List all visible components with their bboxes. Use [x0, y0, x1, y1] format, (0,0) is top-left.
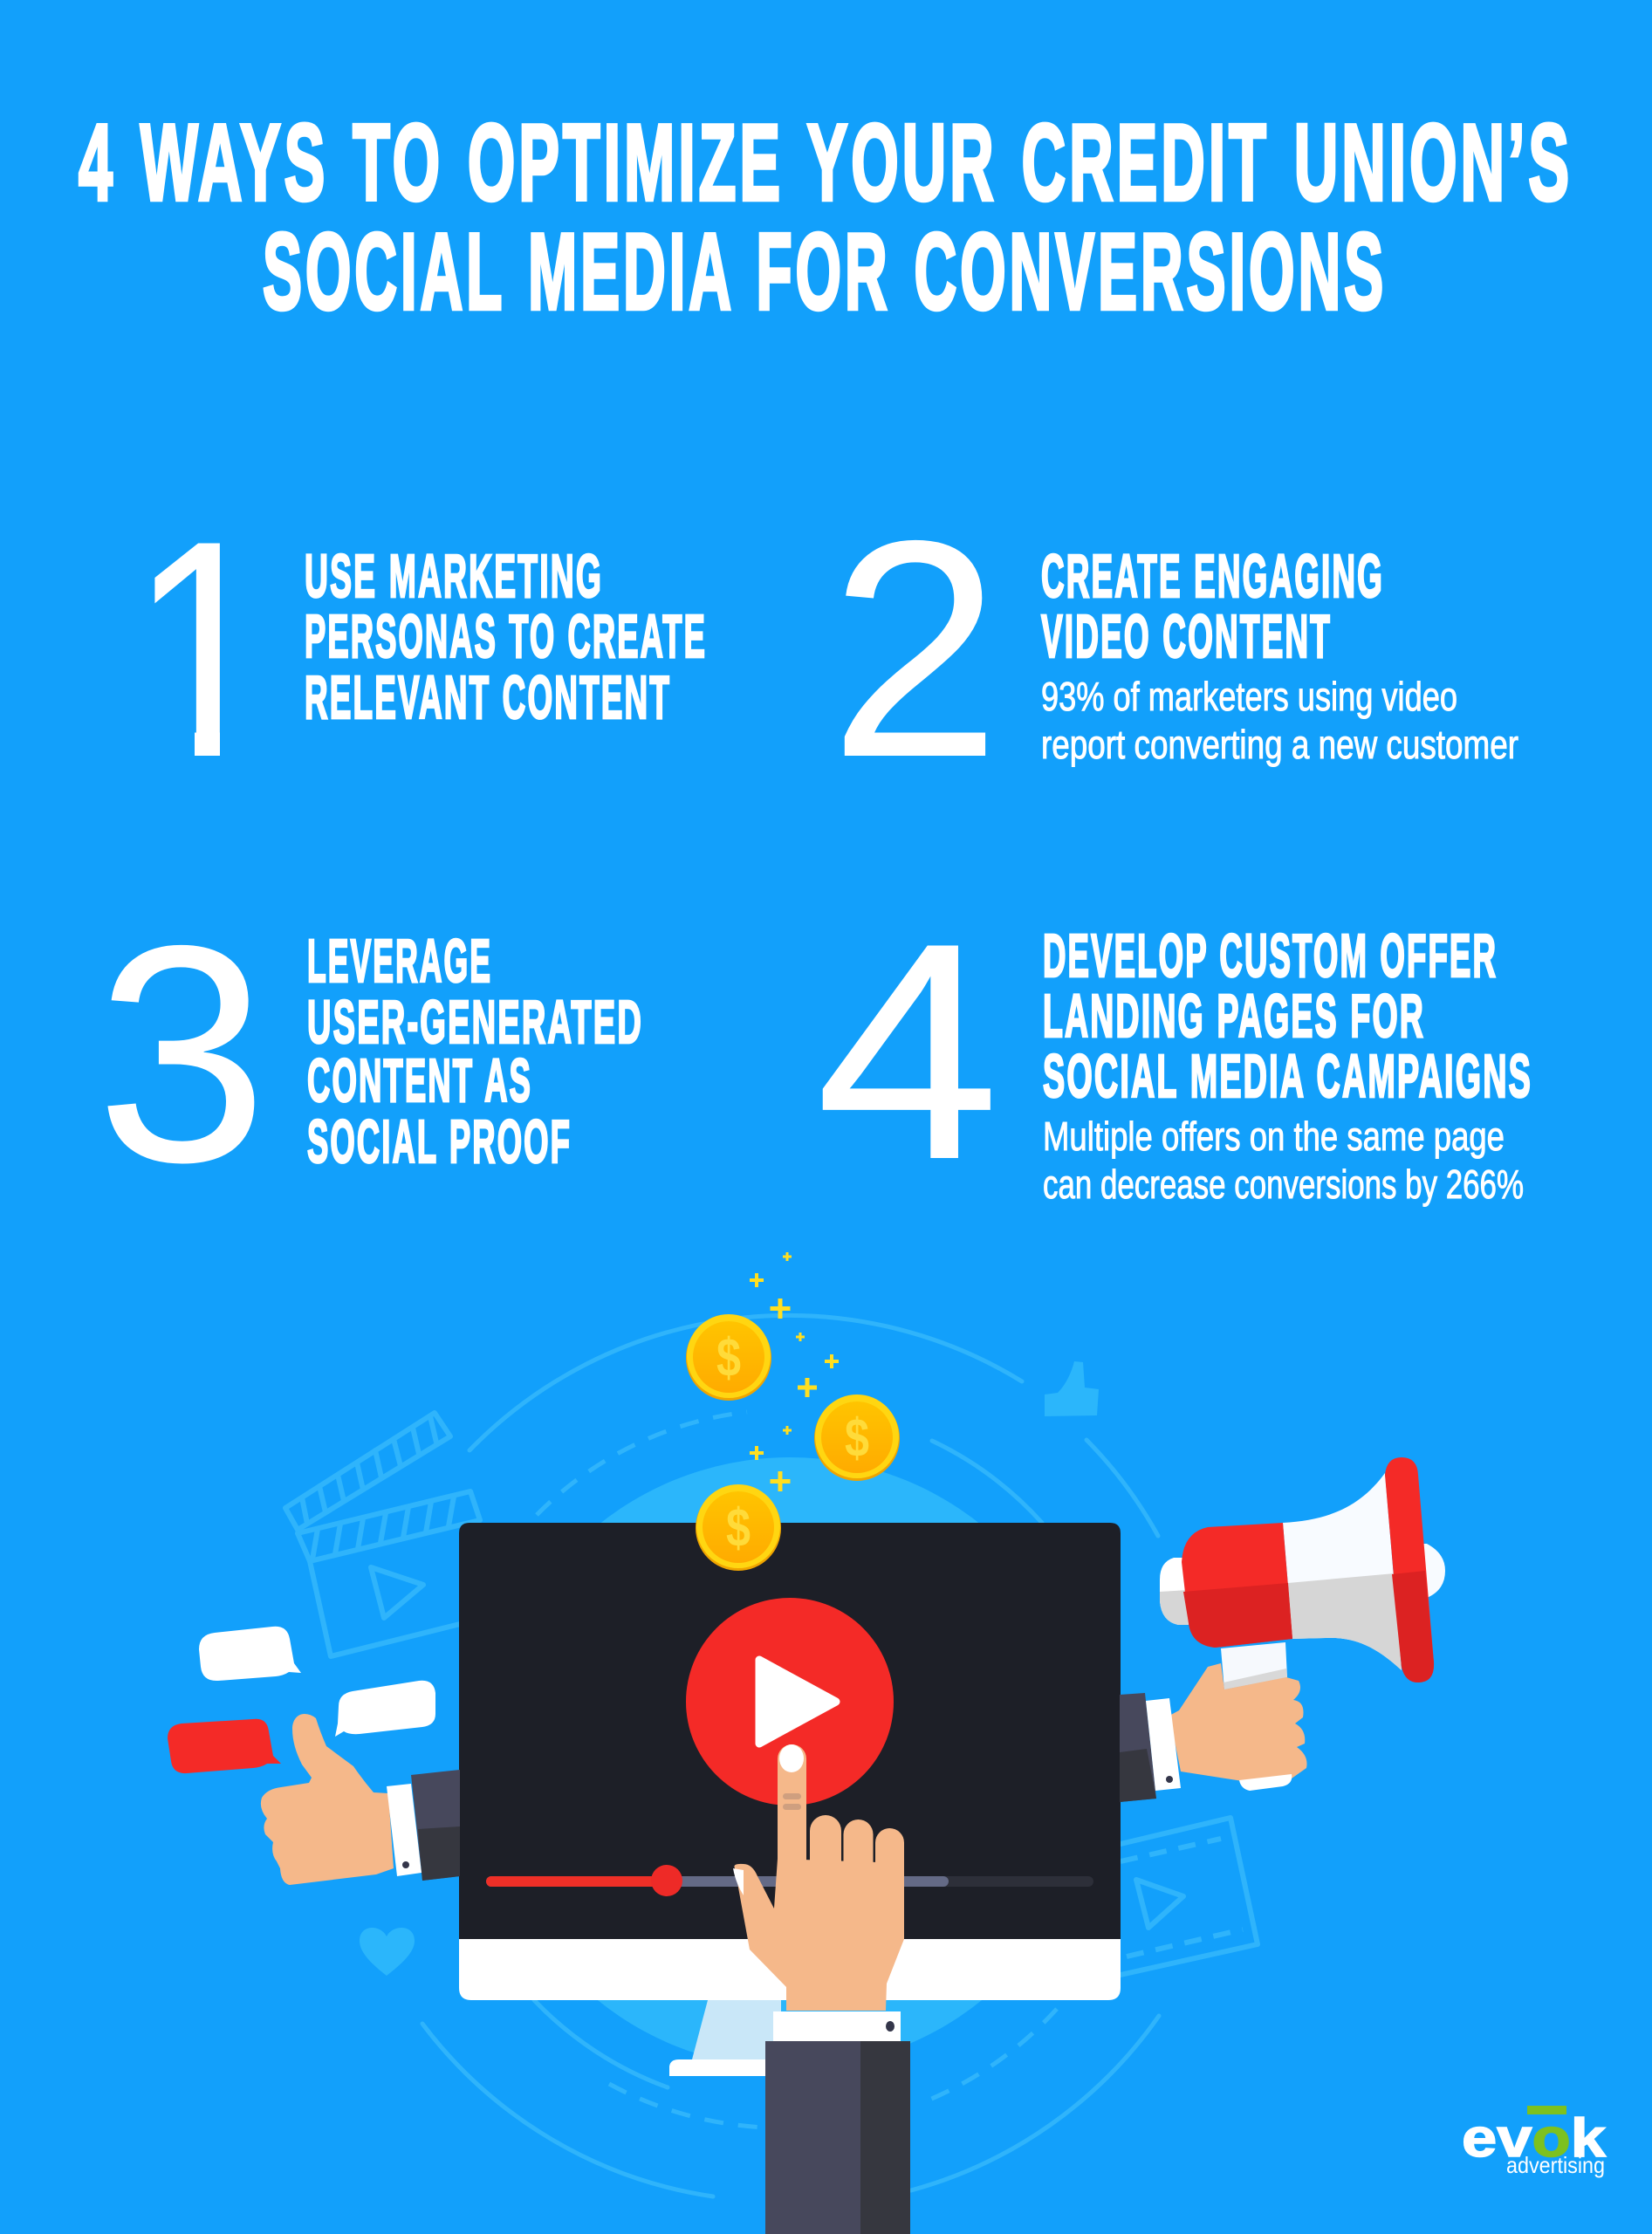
- white bubble 2: [335, 1681, 435, 1737]
- megaphone back cap: [1160, 1558, 1189, 1625]
- coin 1: [686, 1314, 771, 1401]
- icon: ghost clapperboard: [285, 1413, 480, 1656]
- item 1 heading: RELEVANT CONTENT: [305, 663, 671, 731]
- number 2: 2: [829, 477, 1001, 822]
- finger nail: [779, 1744, 804, 1772]
- red bubble: [168, 1719, 281, 1773]
- item 4 heading: [1043, 922, 1532, 1110]
- left hand thumbs up: [261, 1714, 460, 1885]
- item 3 heading: [307, 927, 643, 1175]
- item 1 heading: PERSONAS TO CREATE: [305, 602, 707, 670]
- number 3: 3: [96, 882, 268, 1227]
- item 3: [96, 882, 643, 1227]
- background disc: [484, 1457, 1095, 2068]
- item 4: [815, 880, 1532, 1224]
- item 3 heading: CONTENT AS: [307, 1046, 532, 1114]
- coins and sparkles: [686, 1252, 900, 1571]
- megaphone handle: [1221, 1642, 1287, 1689]
- icon: ghost heart: [360, 1928, 415, 1976]
- number 1: 1: [129, 477, 278, 822]
- right hand with megaphone: [1120, 1457, 1445, 1802]
- orbit arcs: [422, 1315, 1159, 2196]
- handle end: [1239, 1774, 1292, 1791]
- video progress bar: [486, 1865, 1093, 1896]
- white bubble 1: [199, 1627, 301, 1681]
- coin 3: $: [726, 1498, 751, 1559]
- speech bubbles: [168, 1627, 435, 1773]
- logo: evok advertising: evok: [1462, 2108, 1607, 2169]
- item 1 heading: [305, 542, 707, 731]
- item 2 body: [1041, 674, 1518, 767]
- item 1 heading: USE MARKETING: [305, 542, 603, 610]
- pointing hand: [733, 1744, 910, 2234]
- item 2 heading: VIDEO CONTENT: [1041, 602, 1332, 670]
- sparkles: [750, 1252, 839, 1491]
- illustration: video marketing scene: [168, 1252, 1445, 2234]
- hand and fingers: [734, 1744, 904, 2011]
- item 3 heading: SOCIAL PROOF: [307, 1107, 572, 1175]
- play button: [686, 1598, 894, 1806]
- coin 2: $: [845, 1408, 869, 1469]
- cuff: [773, 2011, 901, 2041]
- item 4 body: [1043, 1114, 1524, 1207]
- coin 1: $: [716, 1328, 741, 1388]
- megaphone front cap: [1418, 1544, 1445, 1598]
- item 2 body: report converting a new customer: [1041, 722, 1518, 767]
- hand: [261, 1714, 394, 1885]
- sleeve: [765, 2041, 910, 2234]
- logo: evok advertising: advertising: [1506, 2152, 1605, 2178]
- number 4: 4: [815, 880, 1000, 1224]
- icon: ghost thumbs up: [1045, 1361, 1099, 1416]
- thumb nail: [733, 1868, 744, 1895]
- item 2: [829, 477, 1518, 822]
- item 2 body: 93% of marketers using video: [1041, 674, 1457, 719]
- monitor: [459, 1523, 1121, 2000]
- icon: ghost video frame: [1121, 1818, 1258, 1975]
- title: [79, 103, 1573, 332]
- megaphone flare: [1385, 1457, 1434, 1682]
- item 3 heading: LEVERAGE: [307, 927, 492, 995]
- item 2 heading: [1041, 542, 1384, 670]
- sleeve: [411, 1770, 460, 1881]
- item 4 body: Multiple offers on the same page: [1043, 1114, 1505, 1159]
- knuckle marks: [783, 1793, 801, 1810]
- megaphone cone: [1283, 1473, 1402, 1670]
- megaphone body: [1182, 1523, 1292, 1648]
- hand: [1169, 1663, 1307, 1781]
- coin 3: [696, 1484, 781, 1571]
- cuff: [387, 1784, 422, 1876]
- monitor stand: [669, 2000, 781, 2076]
- item 1: [129, 477, 707, 822]
- item 3 heading: USER-GENERATED: [307, 988, 643, 1056]
- coin 2: [814, 1395, 900, 1481]
- cuff: [1146, 1698, 1181, 1791]
- sleeve: [1120, 1693, 1156, 1802]
